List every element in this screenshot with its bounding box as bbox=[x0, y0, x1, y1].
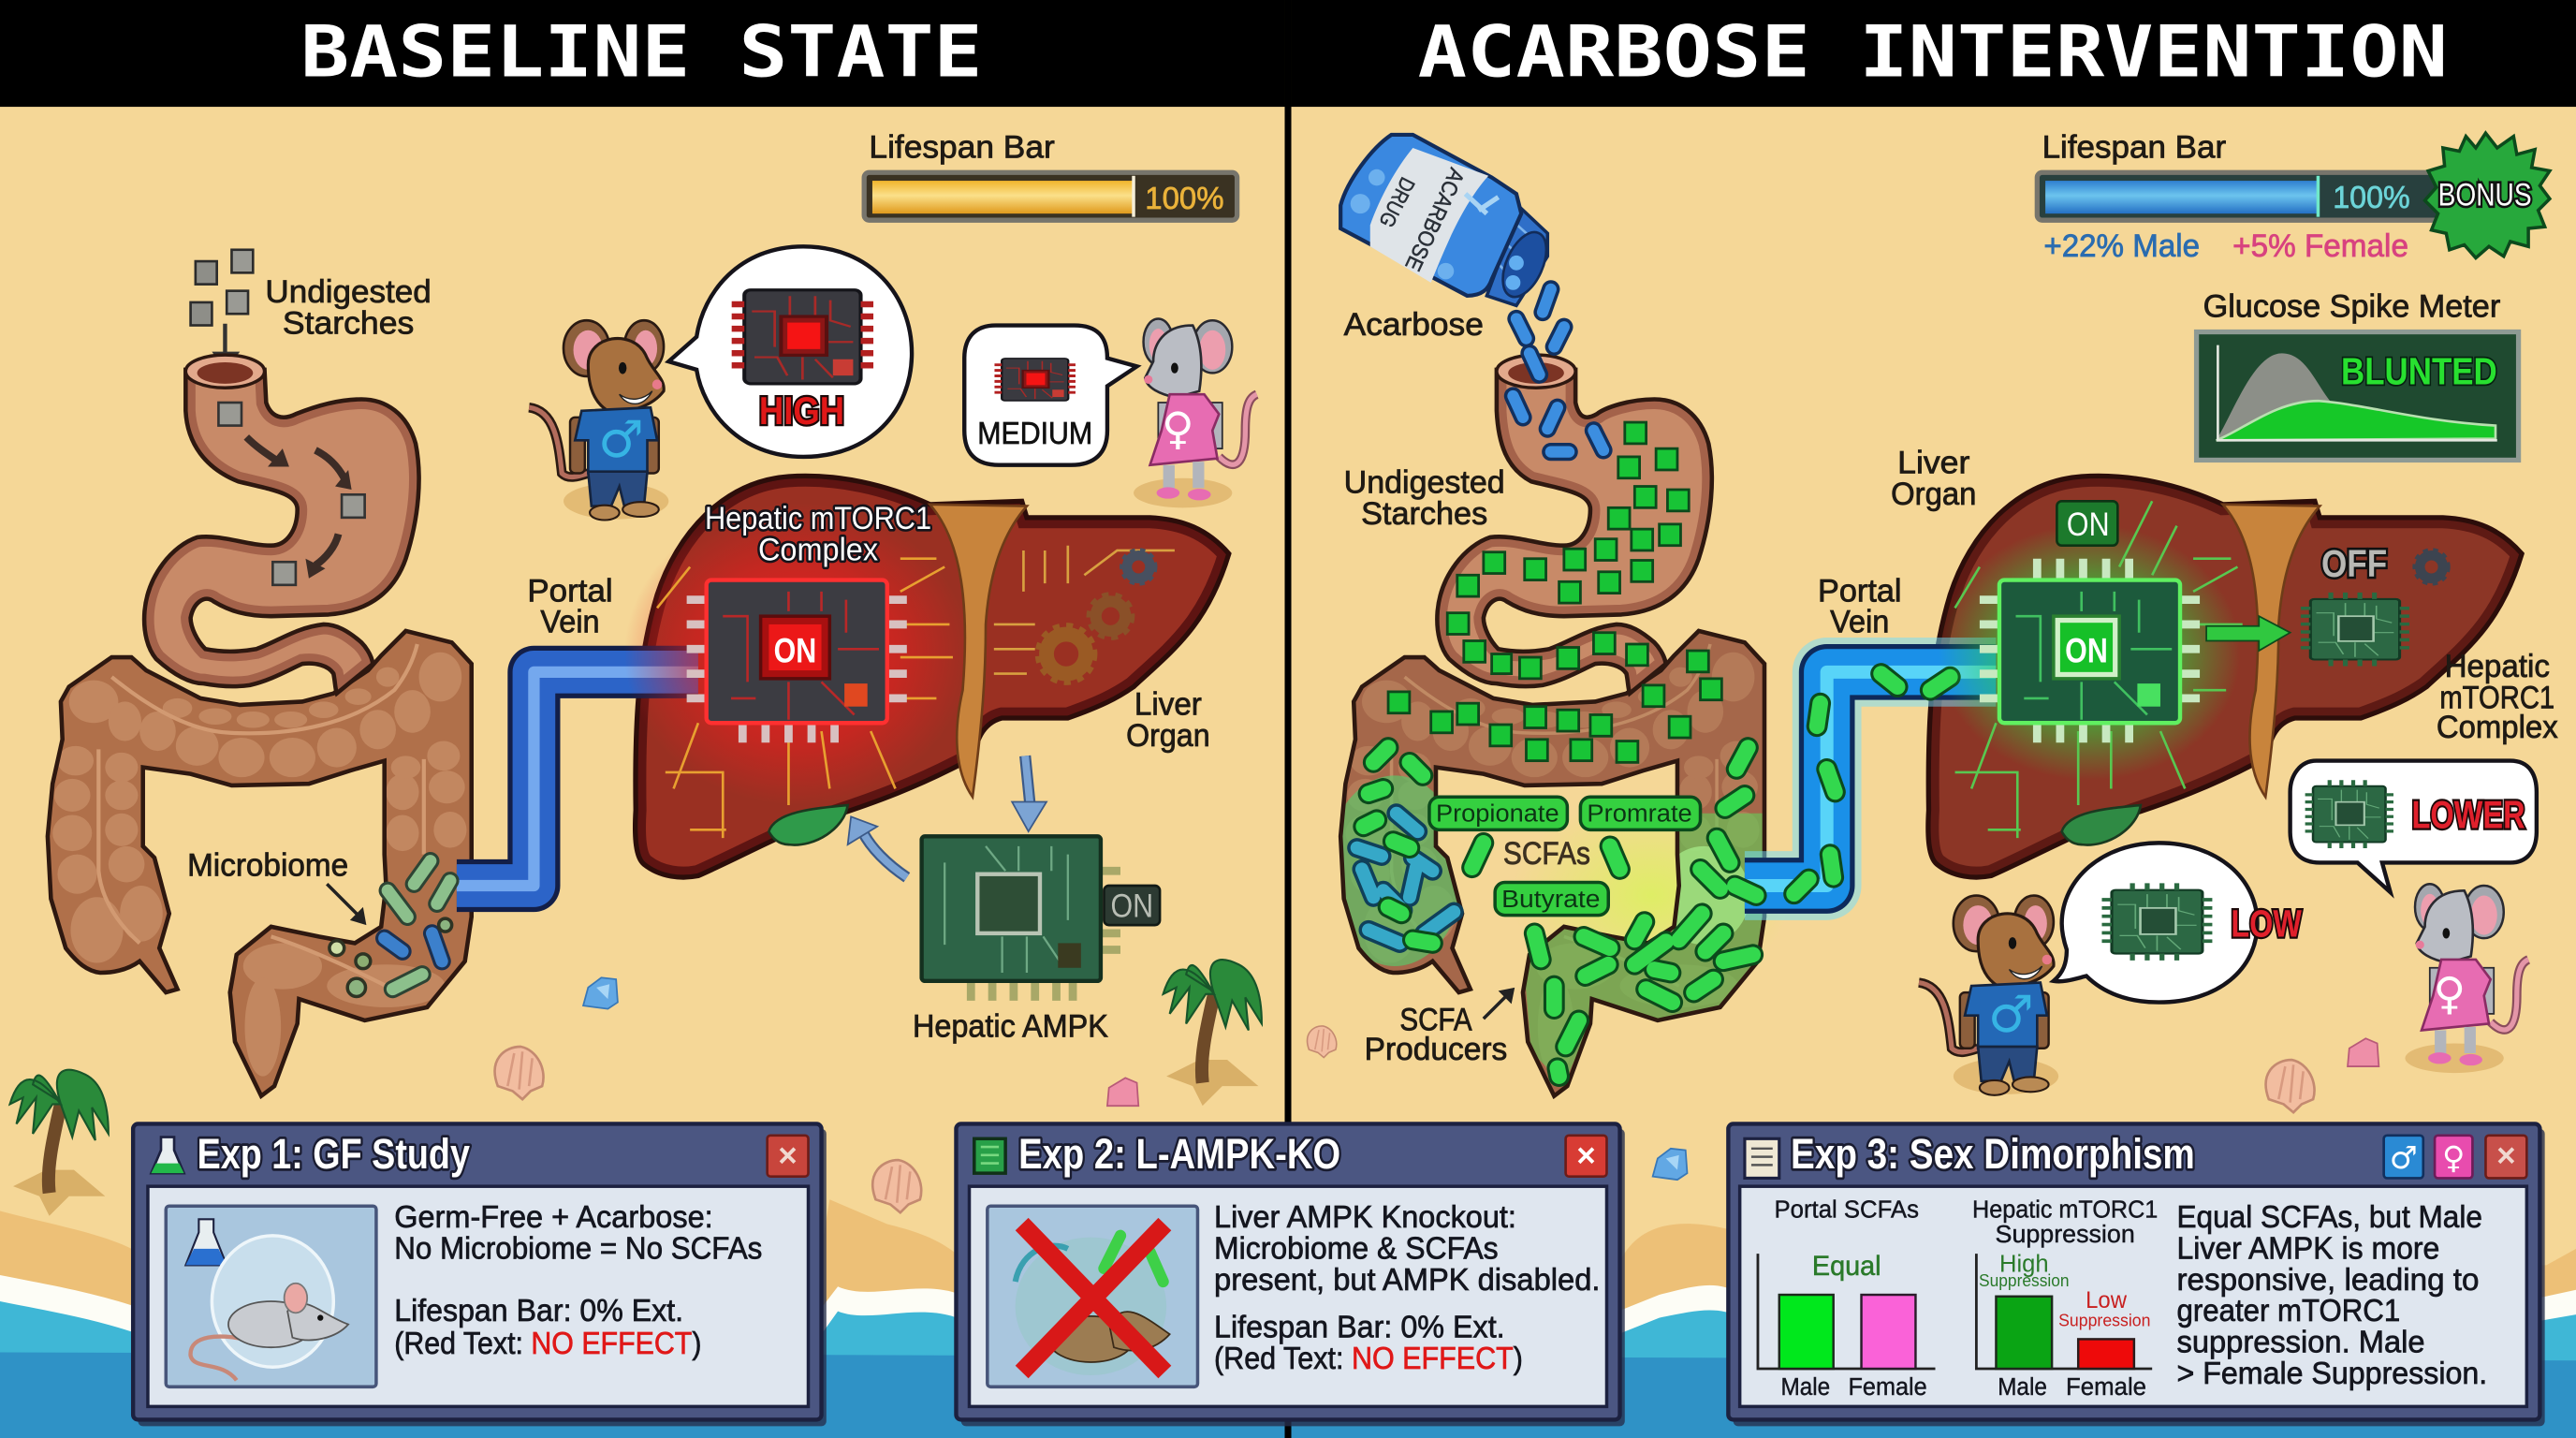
acarbose bottle: ACARBOSE bbox=[1399, 164, 1469, 274]
label: undigested starches intervention: Starches bbox=[1361, 496, 1487, 532]
bar chart: hepatic mTORC1 suppression: Suppression bbox=[1996, 1220, 2135, 1248]
close button bbox=[2485, 1136, 2526, 1178]
speech bubble: low bbox=[2054, 843, 2303, 1003]
window text: Lifespan Bar: 0% Ext. bbox=[1214, 1311, 1505, 1345]
tag: butyrate: Butyrate bbox=[1501, 885, 1600, 913]
bonus badge: BONUS bbox=[2438, 177, 2532, 213]
lifespan bar baseline: Lifespan Bar bbox=[869, 129, 1055, 165]
male mouse: baseline bbox=[529, 320, 668, 520]
speech bubble: medium bbox=[964, 326, 1137, 465]
window text: (Red Text: NO EFFECT) bbox=[1214, 1342, 1523, 1376]
liver circuit traces green bbox=[1955, 501, 2243, 838]
male mouse: intervention bbox=[1919, 896, 2058, 1095]
window text: greater mTORC1 bbox=[2177, 1294, 2400, 1328]
female mouse: baseline bbox=[1134, 318, 1257, 507]
window text: > Female Suppression. bbox=[2177, 1357, 2487, 1391]
label: liver organ bbox=[1126, 686, 1210, 754]
undigested starches: baseline bbox=[191, 250, 432, 372]
label: hepatic mTORC1 complex intervention: Complex bbox=[2437, 710, 2558, 745]
shoreline sand bbox=[0, 1199, 2576, 1438]
window text: Liver AMPK is more bbox=[2177, 1231, 2439, 1266]
microbiome bacteria bbox=[329, 861, 452, 996]
close button bbox=[1566, 1136, 1606, 1177]
bar chart: hepatic mTORC1 suppression: Suppression bbox=[2058, 1310, 2150, 1329]
window text: Germ-Free + Acarbose: bbox=[394, 1200, 713, 1235]
window text bbox=[2177, 1200, 2487, 1391]
tag: propionate: Propionate bbox=[1436, 800, 1559, 828]
close button: × bbox=[2496, 1137, 2516, 1174]
title: baseline state: BASELINE STATE bbox=[300, 11, 983, 94]
microbiome label bbox=[187, 847, 366, 925]
large intestine: intervention bbox=[1325, 631, 1769, 1096]
window text: Lifespan Bar: 0% Ext. bbox=[394, 1294, 683, 1328]
liver circuit traces bbox=[657, 559, 953, 838]
glucose spike meter: BLUNTED bbox=[2341, 350, 2497, 393]
label: liver organ intervention bbox=[1891, 445, 1976, 512]
window text: No Microbiome = No SCFAs bbox=[394, 1231, 762, 1266]
bar chart: portal SCFAs: Portal SCFAs bbox=[1775, 1196, 1919, 1224]
bar chart: hepatic mTORC1 suppression: High bbox=[1999, 1249, 2049, 1277]
SCFA label: SCFAs bbox=[1503, 836, 1590, 872]
header bar: acarbose bbox=[1292, 0, 2576, 107]
portal vein: baseline bbox=[457, 672, 698, 886]
hepatic AMPK chip: ON bbox=[1110, 888, 1153, 924]
window: experiment 3 bbox=[1728, 1123, 2545, 1426]
panel divider bbox=[1284, 0, 1292, 1438]
label: hepatic mTORC1 complex bbox=[705, 501, 931, 567]
label: hepatic mTORC1 complex intervention: mTORC1 bbox=[2439, 680, 2554, 715]
mTORC1 chip: intervention: ON bbox=[2065, 631, 2108, 669]
shallow sea bbox=[0, 1301, 2576, 1438]
off chip bbox=[2301, 593, 2409, 667]
header bar: baseline bbox=[0, 0, 1284, 107]
male button bbox=[2384, 1136, 2423, 1178]
glow around SCFA producers bbox=[1512, 797, 1791, 994]
speech bubble: high bbox=[668, 246, 912, 457]
stomach and small intestine: baseline bbox=[144, 355, 419, 694]
label: hepatic mTORC1 complex intervention: Hepatic bbox=[2445, 649, 2550, 684]
bar chart: hepatic mTORC1 suppression bbox=[1972, 1196, 2158, 1401]
label: liver organ: Organ bbox=[1126, 718, 1210, 754]
acarbose bottle: DRUG bbox=[1374, 173, 1420, 231]
stomach and small intestine: intervention bbox=[1437, 355, 1712, 694]
badge: ON above chip: ON bbox=[2067, 506, 2110, 543]
female button bbox=[2435, 1136, 2472, 1178]
lifespan bar intervention: 100% bbox=[2333, 181, 2410, 215]
window title: Exp 1: GF Study bbox=[198, 1130, 470, 1178]
arrow: to off chip bbox=[2206, 616, 2291, 651]
lifespan bar baseline: 100% bbox=[1145, 182, 1224, 216]
close button: × bbox=[778, 1137, 798, 1174]
starch particles green bbox=[1388, 422, 1721, 762]
bar chart: hepatic mTORC1 suppression: Hepatic mTORC1 bbox=[1972, 1196, 2158, 1224]
window text: Liver AMPK Knockout: bbox=[1214, 1200, 1516, 1235]
label: acarbose: Acarbose bbox=[1344, 307, 1484, 343]
lifespan bar intervention bbox=[2037, 129, 2467, 264]
label: OFF: OFF bbox=[2321, 542, 2387, 585]
title: acarbose intervention: ACARBOSE INTERVENTION bbox=[1418, 11, 2448, 94]
window text: responsive, leading to bbox=[2177, 1263, 2479, 1298]
female mouse: intervention bbox=[2405, 884, 2528, 1073]
bar chart: portal SCFAs: Female bbox=[1848, 1372, 1927, 1401]
label: SCFA producers bbox=[1365, 988, 1515, 1067]
decoration: palms, shells, gems bbox=[10, 960, 2378, 1216]
chip icon bbox=[974, 1138, 1005, 1173]
bar chart: hepatic mTORC1 suppression: Suppression bbox=[1979, 1270, 2070, 1290]
label: portal vein intervention bbox=[1818, 573, 1902, 640]
mTORC1 chip: baseline bbox=[687, 580, 907, 742]
bar chart: portal SCFAs: Male bbox=[1781, 1372, 1830, 1401]
window text: suppression. Male bbox=[2177, 1325, 2425, 1359]
label: portal vein: Vein bbox=[540, 605, 600, 640]
lifespan bar intervention: Lifespan Bar bbox=[2042, 129, 2226, 165]
window title: Exp 3: Sex Dimorphism bbox=[1791, 1130, 2195, 1178]
sea foam bbox=[0, 1275, 2576, 1438]
bar chart: hepatic mTORC1 suppression: Female bbox=[2066, 1372, 2146, 1401]
bar chart: hepatic mTORC1 suppression: Male bbox=[1998, 1372, 2047, 1401]
undigested starches: baseline: Starches bbox=[283, 305, 414, 341]
label: liver organ intervention: Liver bbox=[1897, 445, 1969, 480]
bar chart: hepatic mTORC1 suppression: Low bbox=[2086, 1288, 2127, 1313]
badge: ON above chip bbox=[2056, 501, 2117, 546]
window text: present, but AMPK disabled. bbox=[1214, 1263, 1600, 1298]
label: liver organ: Liver bbox=[1134, 686, 1202, 722]
illustration: germ-free mouse in bubble bbox=[166, 1206, 376, 1387]
window: experiment 1 bbox=[133, 1123, 827, 1426]
window text: Microbiome & SCFAs bbox=[1214, 1231, 1499, 1266]
label: liver organ intervention: Organ bbox=[1891, 477, 1976, 512]
lifespan bar intervention: +22% Male bbox=[2043, 228, 2200, 264]
mTORC1 chip: baseline: ON bbox=[774, 631, 816, 669]
label: SCFA producers: Producers bbox=[1365, 1032, 1507, 1067]
window title: Exp 2: L-AMPK-KO bbox=[1018, 1130, 1340, 1178]
speech bubble: high: HIGH bbox=[759, 389, 844, 433]
speech bubble: low: LOW bbox=[2231, 902, 2303, 945]
tag: butyrate bbox=[1495, 882, 1608, 916]
arrow: liver to AMPK bbox=[1012, 756, 1046, 831]
deep sea bbox=[0, 1352, 2576, 1438]
label: SCFA producers: SCFA bbox=[1399, 1002, 1472, 1037]
label: hepatic AMPK: Hepatic AMPK bbox=[913, 1008, 1108, 1044]
label: hepatic mTORC1 complex: Complex bbox=[758, 532, 878, 567]
illustration: knockout mouse with cross bbox=[988, 1206, 1197, 1387]
acarbose capsules bbox=[1513, 289, 1603, 452]
lifespan bar baseline bbox=[864, 129, 1237, 220]
label: undigested starches intervention bbox=[1344, 465, 1505, 532]
close button bbox=[768, 1136, 809, 1177]
label: portal vein: Portal bbox=[527, 573, 613, 609]
window text: Equal SCFAs, but Male bbox=[2177, 1200, 2482, 1235]
glucose spike meter: Glucose Spike Meter bbox=[2203, 289, 2500, 325]
male button: ♂ bbox=[2390, 1139, 2418, 1176]
flask icon bbox=[151, 1137, 184, 1173]
acarbose bottle bbox=[1340, 135, 1555, 305]
bonus badge bbox=[2425, 133, 2550, 258]
tag: promrate: Promrate bbox=[1587, 800, 1692, 828]
hepatic AMPK chip bbox=[922, 836, 1160, 1001]
close button: × bbox=[1576, 1137, 1596, 1174]
window text bbox=[394, 1200, 762, 1361]
green glow around mTORC1 bbox=[1939, 524, 2241, 781]
mTORC1 chip: intervention bbox=[1980, 559, 2200, 742]
undigested starches: baseline: Undigested bbox=[265, 274, 432, 310]
green SCFA bacteria bbox=[1357, 674, 1950, 1077]
label: undigested starches intervention: Undigested bbox=[1344, 465, 1505, 501]
gear dim bbox=[2415, 550, 2448, 583]
window: experiment 2 bbox=[956, 1123, 1625, 1426]
label: portal vein bbox=[527, 573, 613, 640]
bar chart: portal SCFAs bbox=[1758, 1196, 1936, 1401]
speech bubble: medium: MEDIUM bbox=[977, 417, 1092, 451]
bar chart: portal SCFAs: Equal bbox=[1812, 1251, 1881, 1282]
gears in right lobe bbox=[1038, 550, 1155, 682]
label: hepatic mTORC1 complex intervention bbox=[2437, 649, 2558, 745]
liver: baseline bbox=[636, 476, 1229, 877]
label: portal vein intervention: Portal bbox=[1818, 573, 1902, 609]
liver: intervention bbox=[1928, 476, 2522, 877]
female button: ♀ bbox=[2442, 1139, 2465, 1176]
window text: (Red Text: NO EFFECT) bbox=[394, 1327, 701, 1361]
large intestine: baseline bbox=[48, 631, 472, 1096]
lifespan bar intervention: +5% Female bbox=[2232, 228, 2408, 264]
glucose spike meter bbox=[2197, 289, 2519, 460]
label: hepatic mTORC1 complex: Hepatic mTORC1 bbox=[705, 501, 931, 536]
label: portal vein intervention: Vein bbox=[1830, 605, 1889, 640]
microbiome label: Microbiome bbox=[187, 847, 348, 883]
speech bubble: lower bbox=[2291, 761, 2537, 892]
arrow: AMPK to liver bbox=[848, 816, 907, 877]
portal vein: intervention bbox=[1745, 672, 1996, 886]
window text bbox=[1214, 1200, 1600, 1376]
red glow around mTORC1 bbox=[624, 503, 970, 805]
document icon bbox=[1745, 1138, 1779, 1178]
speech bubble: lower: LOWER bbox=[2411, 793, 2525, 837]
